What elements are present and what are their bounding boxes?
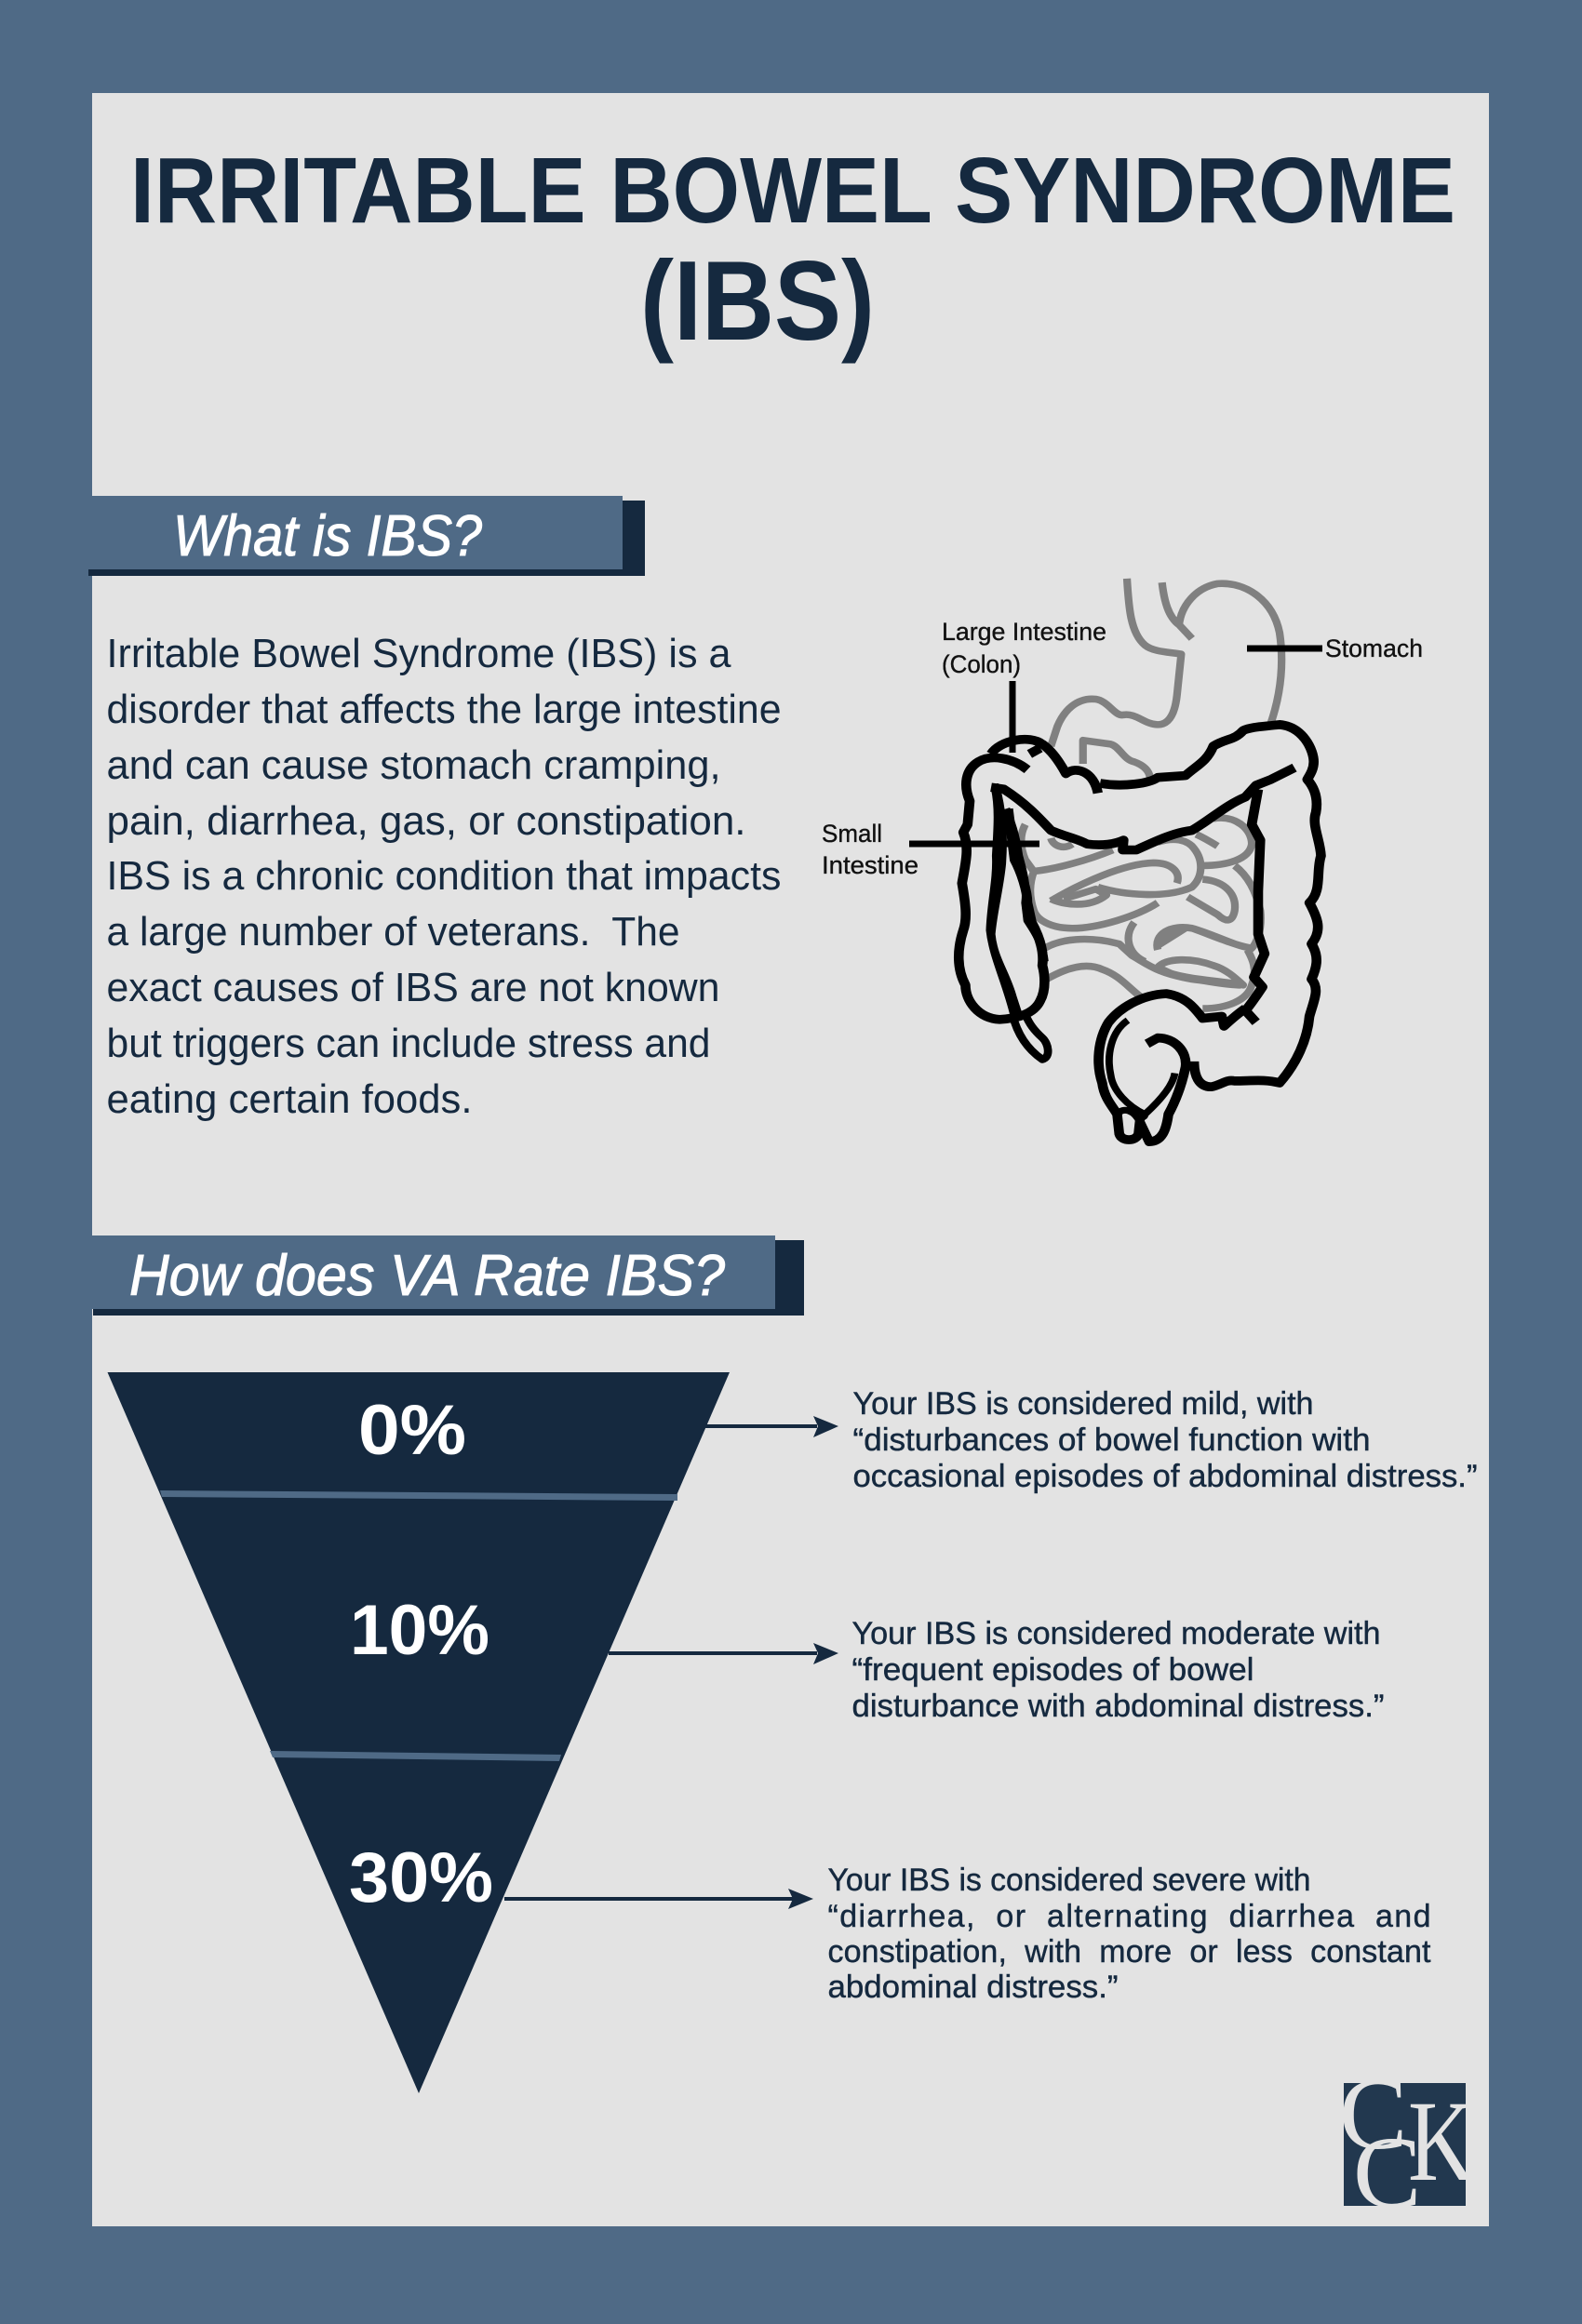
arrow: 10% <box>609 1643 838 1664</box>
label: large intestine: (Colon) <box>942 650 1021 678</box>
heading banner: How does VA Rate IBS?: How does VA Rate IBS? <box>129 1244 725 1308</box>
heading banner: What is IBS?: What is IBS? <box>173 504 482 568</box>
rating: 30%: 30% <box>349 1838 493 1917</box>
text block: what is IBS description: IBS is a chronic condition that impacts <box>106 853 782 899</box>
text block: 30% description: “diarrhea, or alternating diarrhea and <box>828 1899 1431 1934</box>
text block: what is IBS description: and can cause stomach cramping, <box>106 742 720 788</box>
heading banner: What is IBS? <box>88 496 645 576</box>
text block: what is IBS description: exact causes of IBS are not known <box>106 965 720 1010</box>
title: (IBS) <box>640 237 875 364</box>
label: small intestine <box>822 820 918 879</box>
text block: 30% description: abdominal distress.” <box>828 1970 1119 2005</box>
text block: what is IBS description: a large number of veterans. The <box>106 909 679 955</box>
text block: what is IBS description: disorder that affects the large intestine <box>106 687 782 732</box>
label lines <box>909 648 1322 844</box>
text block: what is IBS description: eating certain foods. <box>106 1076 473 1122</box>
rating: 10%: 10% <box>350 1591 489 1670</box>
label: small intestine: Intestine <box>822 851 918 879</box>
text block: 0% description <box>852 1386 1478 1494</box>
large intestine (black) <box>959 725 1321 1142</box>
label: small intestine: Small <box>822 820 882 848</box>
text block: what is IBS description: but triggers can include stress and <box>106 1021 711 1066</box>
text block: 0% description: occasional episodes of abdominal distress.” <box>852 1459 1478 1494</box>
text block: 0% description: Your IBS is considered mild, with <box>852 1386 1314 1422</box>
text block: 10% description: “frequent episodes of bowel <box>852 1652 1254 1688</box>
text block: what is IBS description: pain, diarrhea, gas, or constipation. <box>106 798 746 844</box>
text block: 30% description: constipation, with more or less constant <box>828 1934 1431 1970</box>
text block: 10% description: disturbance with abdominal distress.” <box>852 1689 1385 1724</box>
arrow: 0% <box>703 1416 838 1437</box>
text block: 30% description: Your IBS is considered severe with <box>828 1863 1310 1898</box>
logo: CCK: C <box>1353 2116 1421 2229</box>
text block: 10% description: Your IBS is considered moderate with <box>852 1616 1381 1651</box>
title: IRRITABLE BOWEL SYNDROME <box>130 139 1455 243</box>
logo: CCK <box>1339 2057 1475 2229</box>
text block: what is IBS description <box>106 631 782 1122</box>
label: large intestine: Large Intestine <box>942 618 1106 646</box>
text block: 30% description <box>828 1863 1431 2005</box>
text block: 0% description: “disturbances of bowel function with <box>852 1422 1370 1458</box>
label: stomach: Stomach <box>1325 634 1423 662</box>
stomach and small intestine (gray) <box>1021 579 1281 1008</box>
rating: 0%: 0% <box>358 1391 466 1470</box>
label: large intestine <box>942 618 1106 678</box>
text block: 10% description <box>852 1616 1385 1724</box>
diagram: digestive system with labels <box>822 579 1423 1142</box>
arrow: 30% <box>504 1889 813 1909</box>
title <box>130 139 1455 364</box>
text block: what is IBS description: Irritable Bowel Syndrome (IBS) is a <box>106 631 731 676</box>
logo: CCK: C <box>1339 2057 1407 2170</box>
funnel chart: VA ratings <box>108 1372 730 2093</box>
